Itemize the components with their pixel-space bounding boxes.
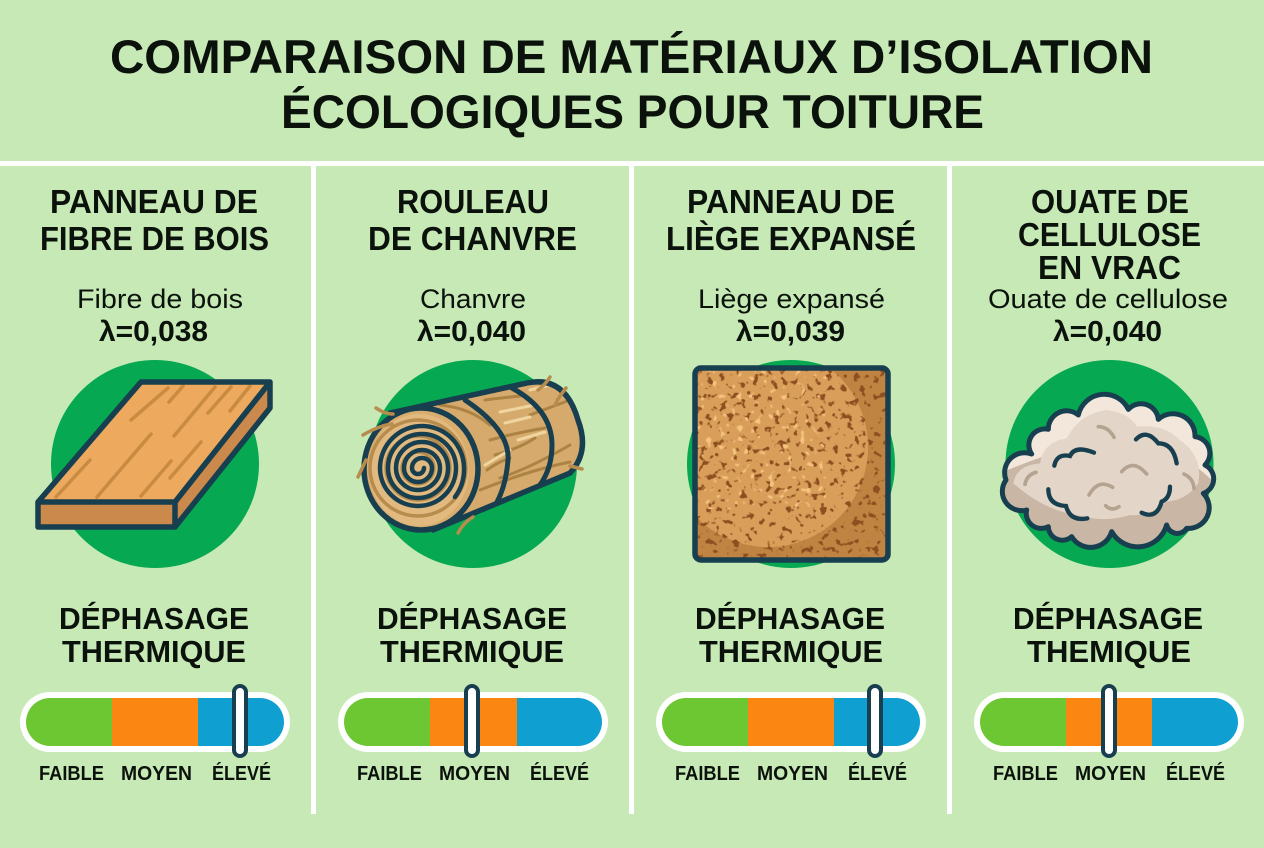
gauge: moyen: FAIBLE xyxy=(357,762,422,785)
label: déphasage thermique: THERMIQUE xyxy=(380,634,564,669)
gauge: élevé: MOYEN xyxy=(757,762,828,785)
gauge: moyen: MOYEN xyxy=(439,762,510,785)
heading: rouleau de chanvre xyxy=(368,183,577,257)
gauge: moyen: MOYEN xyxy=(1075,762,1146,785)
material and lambda value: Fibre de bois xyxy=(77,284,243,314)
title: COMPARAISON DE MATÉRIAUX D’ISOLATION xyxy=(110,30,1153,83)
heading: panneau de liège expansé xyxy=(666,183,916,257)
panel: ouate de cellulose en vrac xyxy=(974,183,1244,785)
heading: panneau de fibre de bois xyxy=(40,183,269,257)
gauge: élevé: FAIBLE xyxy=(675,762,740,785)
icon: wood board xyxy=(38,360,270,568)
gauge: moyen xyxy=(338,686,608,785)
panel: panneau de liège expansé xyxy=(656,183,926,785)
material and lambda value xyxy=(77,284,243,348)
label: déphasage thermique: DÉPHASAGE xyxy=(695,601,885,636)
label: déphasage thermique xyxy=(377,601,567,669)
label: déphasage thermique xyxy=(695,601,885,669)
label: déphasage thermique: THERMIQUE xyxy=(62,634,246,669)
material and lambda value: λ=0,040 xyxy=(417,316,526,348)
label: déphasage themique xyxy=(1013,601,1203,669)
title xyxy=(110,30,1153,138)
heading: panneau de liège expansé: PANNEAU DE xyxy=(687,183,895,220)
gauge: élevé: ÉLEVÉ xyxy=(212,762,271,785)
material and lambda value: λ=0,038 xyxy=(99,316,208,348)
heading: ouate de cellulose en vrac: CELLULOSE xyxy=(1018,216,1201,253)
material and lambda value xyxy=(988,284,1228,348)
gauge: élevé xyxy=(656,686,926,785)
icon: cellulose wadding cloud xyxy=(990,360,1230,568)
material and lambda value: λ=0,040 xyxy=(1053,316,1162,348)
label: déphasage thermique xyxy=(59,601,249,669)
label: déphasage themique: DÉPHASAGE xyxy=(1013,601,1203,636)
heading: panneau de fibre de bois: FIBRE DE BOIS xyxy=(40,220,269,257)
material and lambda value: Liège expansé xyxy=(698,284,885,314)
label: déphasage thermique: DÉPHASAGE xyxy=(59,601,249,636)
material and lambda value xyxy=(698,284,885,348)
label: déphasage themique: THEMIQUE xyxy=(1027,634,1191,669)
gauge: moyen: FAIBLE xyxy=(993,762,1058,785)
gauge: élevé xyxy=(20,686,290,785)
gauge: moyen: ÉLEVÉ xyxy=(1166,762,1225,785)
label: déphasage thermique: DÉPHASAGE xyxy=(377,601,567,636)
heading: rouleau de chanvre: ROULEAU xyxy=(397,183,549,220)
title: ÉCOLOGIQUES POUR TOITURE xyxy=(281,85,984,138)
panel: panneau de fibre de bois xyxy=(20,183,290,785)
heading: panneau de fibre de bois: PANNEAU DE xyxy=(50,183,258,220)
icon: cork panel xyxy=(687,360,895,568)
icon: hemp roll xyxy=(358,360,582,568)
gauge: moyen: ÉLEVÉ xyxy=(530,762,589,785)
material and lambda value: λ=0,039 xyxy=(736,316,845,348)
gauge: élevé: FAIBLE xyxy=(39,762,104,785)
heading: ouate de cellulose en vrac xyxy=(1018,183,1201,286)
material and lambda value: Ouate de cellulose xyxy=(988,284,1228,314)
material and lambda value: Chanvre xyxy=(420,284,526,314)
heading: rouleau de chanvre: DE CHANVRE xyxy=(368,220,577,257)
heading: ouate de cellulose en vrac: OUATE DE xyxy=(1031,183,1189,220)
gauge: élevé: MOYEN xyxy=(121,762,192,785)
material and lambda value xyxy=(417,284,526,348)
heading: panneau de liège expansé: LIÈGE EXPANSÉ xyxy=(666,220,916,257)
gauge: moyen xyxy=(974,686,1244,785)
label: déphasage thermique: THERMIQUE xyxy=(699,634,883,669)
gauge: élevé: ÉLEVÉ xyxy=(848,762,907,785)
heading: ouate de cellulose en vrac: EN VRAC xyxy=(1038,249,1181,286)
panel: rouleau de chanvre xyxy=(338,183,608,785)
